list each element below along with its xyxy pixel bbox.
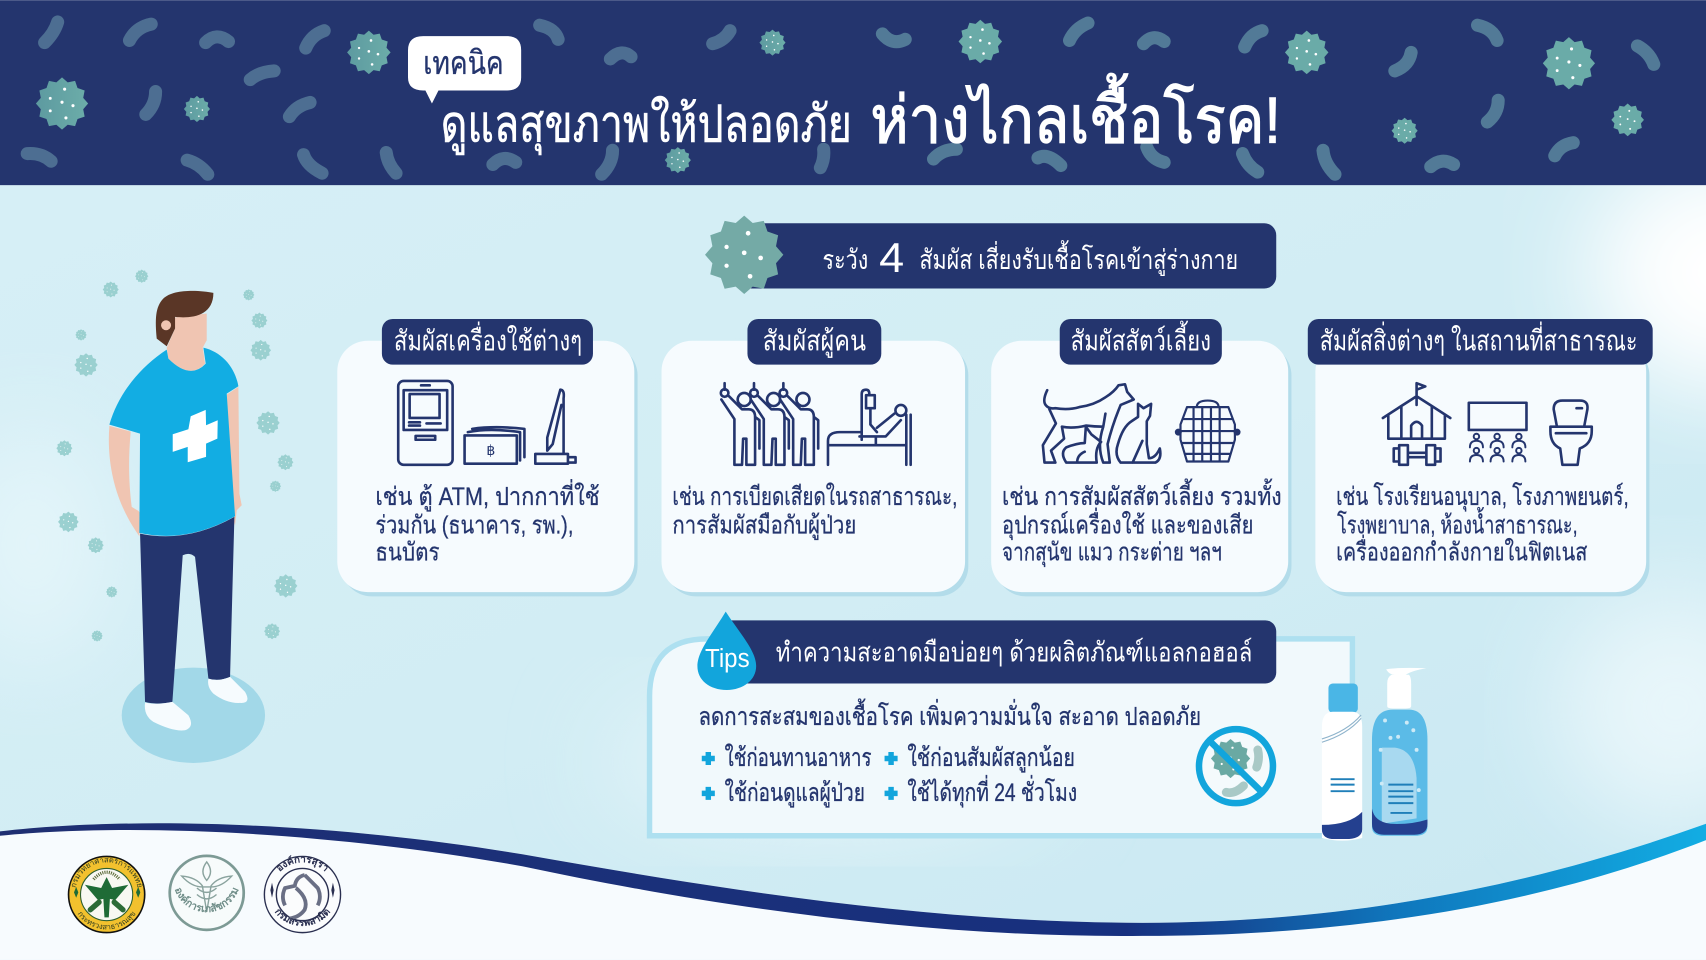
icon: hand gel pump bottle [1372,668,1427,836]
logo: Liquor Distillery Organization [264,855,342,934]
logo: Department of Medical Sciences: กรมวิทยาศาสตร์การแพทย์ [72,858,144,888]
tips bullet list: ใช้ได้ทุกที่ 24 ชั่วโมง [907,775,1077,808]
logo: Department of Medical Sciences: กระทรวงสาธารณสุข [78,912,136,930]
panel: equipment: สัมผัสเครื่องใช้ต่างๆ [394,322,582,357]
title: ดูแลสุขภาพให้ปลอดภัย [441,96,852,156]
icon: ATM, banknotes, pen: ฿ [486,442,495,458]
tips heading bar: Tips [705,643,750,673]
person with germs [56,270,297,763]
panel: pets: จากสุนัข แมว กระต่าย ฯลฯ [1002,539,1222,568]
tips bullet list: ใช้ก่อนสัมผัสลูกน้อย [907,743,1075,773]
logo: Department of Medical Sciences [68,856,146,934]
title: ห่างไกลเชื้อโรค! [870,73,1281,157]
tips heading bar: ทำความสะอาดมือบ่อยๆ ด้วยผลิตภัณฑ์แอลกอฮอล์ [776,637,1252,668]
icon: no germs [1199,729,1273,803]
heading bar: 4 contacts: 4 [879,235,904,281]
logo: Government Pharmaceutical Organization: องค์การเภสัชกรรม [174,888,239,912]
panel: public places: เครื่องออกกำลังกายในฟิตเนส [1336,535,1587,567]
panel: people: เช่น การเบียดเสียดในรถสาธารณะ, [672,482,957,511]
tips bullet list: ใช้ก่อนดูแลผู้ป่วย [725,778,865,808]
panel: public places: โรงพยาบาล, ห้องน้ำสาธารณะ, [1337,506,1578,539]
bottom wave [0,823,1706,960]
panel: people: สัมผัสผู้คน [763,325,866,359]
panel: equipment: เช่น ตู้ ATM, ปากกาที่ใช้ [375,479,599,512]
icon: dog, cat, rabbit and carrier [1043,384,1239,463]
tips bullet list [702,743,1077,808]
panel: pets [991,319,1291,596]
panel: equipment: ร่วมกัน (ธนาคาร, รพ.), [375,511,573,539]
icon: ATM, banknotes, pen [398,381,576,465]
icon: school, dumbbell, cinema, toilet [1383,383,1592,465]
panel: people: การสัมผัสมือกับผู้ป่วย [672,511,856,540]
icon: spray bottle [1322,683,1362,841]
heading bar: 4 contacts [705,216,1276,294]
tips heading bar [697,612,1276,690]
tips bullet list: ใช้ก่อนทานอาหาร [725,743,871,772]
panel: public places [1308,319,1653,596]
panel: pets: อุปกรณ์เครื่องใช้ และของเสีย [1002,507,1253,540]
heading bar: 4 contacts: สัมผัส เสี่ยงรับเชื้อโรคเข้าสู่ร่างกาย [919,240,1238,276]
title speech bubble: เทคนิค [423,44,504,81]
header bacteria pattern [27,20,1654,174]
panel: equipment [337,319,638,596]
logo: Government Pharmaceutical Organization [168,854,246,932]
heading bar: 4 contacts: ระวัง [823,244,868,275]
logo: Liquor Distillery Organization: องค์การสุรา [277,855,328,872]
panel: tips [650,612,1427,841]
tips summary: ลดการสะสมของเชื้อโรค เพิ่มความมั่นใจ สะอาด ปลอดภัย [699,698,1201,731]
logo: Liquor Distillery Organization: กรมสรรพสามิต [274,909,330,926]
icon: passengers and hospital patient [721,383,911,465]
panel: pets: เช่น การสัมผัสสัตว์เลี้ยง รวมทั้ง [1002,478,1282,511]
panel: pets: สัมผัสสัตว์เลี้ยง [1071,321,1211,357]
title [441,73,1281,157]
header band [0,0,1706,185]
panel: equipment: ธนบัตร [375,539,440,567]
title speech bubble [408,36,521,104]
panel: people [662,319,968,596]
